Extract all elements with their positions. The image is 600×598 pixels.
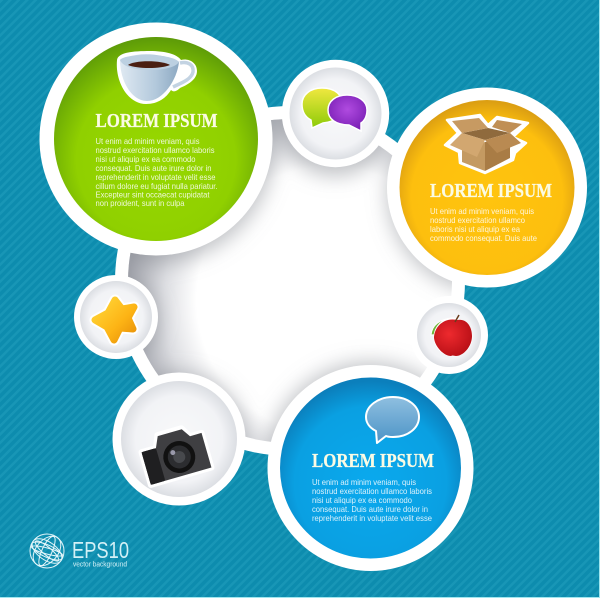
text block: blue panel: reprehenderit in voluptate velit esse: [312, 514, 432, 523]
icon: cardboard box: [445, 115, 528, 173]
icon: star: [95, 300, 134, 340]
text block: blue panel: nisi ut aliquip ex ea commodo: [312, 496, 412, 505]
text block: green panel: Excepteur sint occaecat cupidatat: [96, 190, 210, 200]
icon: apple: [431, 315, 472, 356]
text block: blue panel: [312, 478, 432, 523]
icon: speech bubble: [366, 397, 419, 443]
text block: green panel: consequat. Duis aute irure dolor in: [96, 164, 212, 173]
icon: camera: [138, 423, 211, 485]
text block: blue panel: consequat. Duis aute irure dolor in: [312, 505, 428, 514]
text block: orange panel: nostrud exercitation ullamco: [430, 216, 525, 225]
text block: blue panel: nostrud exercitation ullamco laboris: [312, 487, 432, 496]
panel: orange box circle: [387, 88, 587, 288]
label: EPS10: EPS10: [72, 537, 129, 563]
text block: green panel: reprehenderit in voluptate velit esse: [96, 173, 216, 182]
icon: chat bubbles: [302, 88, 367, 131]
panel: blue speech circle: [268, 365, 474, 571]
text block: orange panel: Ut enim ad minim veniam, quis: [430, 207, 534, 216]
heading: orange panel: LOREM IPSUM: [430, 180, 552, 202]
text block: green panel: nostrud exercitation ullamco laboris: [96, 146, 214, 155]
icon: coffee cup: [117, 51, 197, 104]
heading: green panel: LOREM IPSUM: [96, 110, 218, 132]
panel: chat bubbles circle: [282, 60, 389, 167]
panel: camera circle: [112, 372, 246, 506]
text block: orange panel: [430, 207, 537, 243]
text block: green panel: nisi ut aliquip ex ea commodo: [96, 155, 196, 164]
logo: EPS10 vector background: [28, 531, 129, 571]
text block: green panel: Ut enim ad minim veniam, quis: [96, 137, 200, 146]
text block: green panel: non proident, sunt in culpa: [96, 199, 185, 208]
panel: star circle: [74, 275, 158, 359]
icon: wire globe: [28, 531, 66, 571]
heading: blue panel: LOREM IPSUM: [312, 450, 434, 472]
central white ring disc: [115, 106, 465, 455]
text block: blue panel: Ut enim ad minim veniam, quis: [312, 478, 416, 487]
text block: orange panel: laboris nisi ut aliquip ex ea: [430, 225, 520, 234]
text block: green panel: [96, 137, 218, 208]
panel: green coffee circle: [40, 22, 272, 256]
panel: apple circle: [410, 296, 488, 374]
label: vector background: vector background: [73, 560, 127, 568]
text block: orange panel: commodo consequat. Duis aute: [430, 234, 537, 243]
text block: green panel: cillum dolore eu fugiat nulla pariatur.: [96, 182, 218, 191]
